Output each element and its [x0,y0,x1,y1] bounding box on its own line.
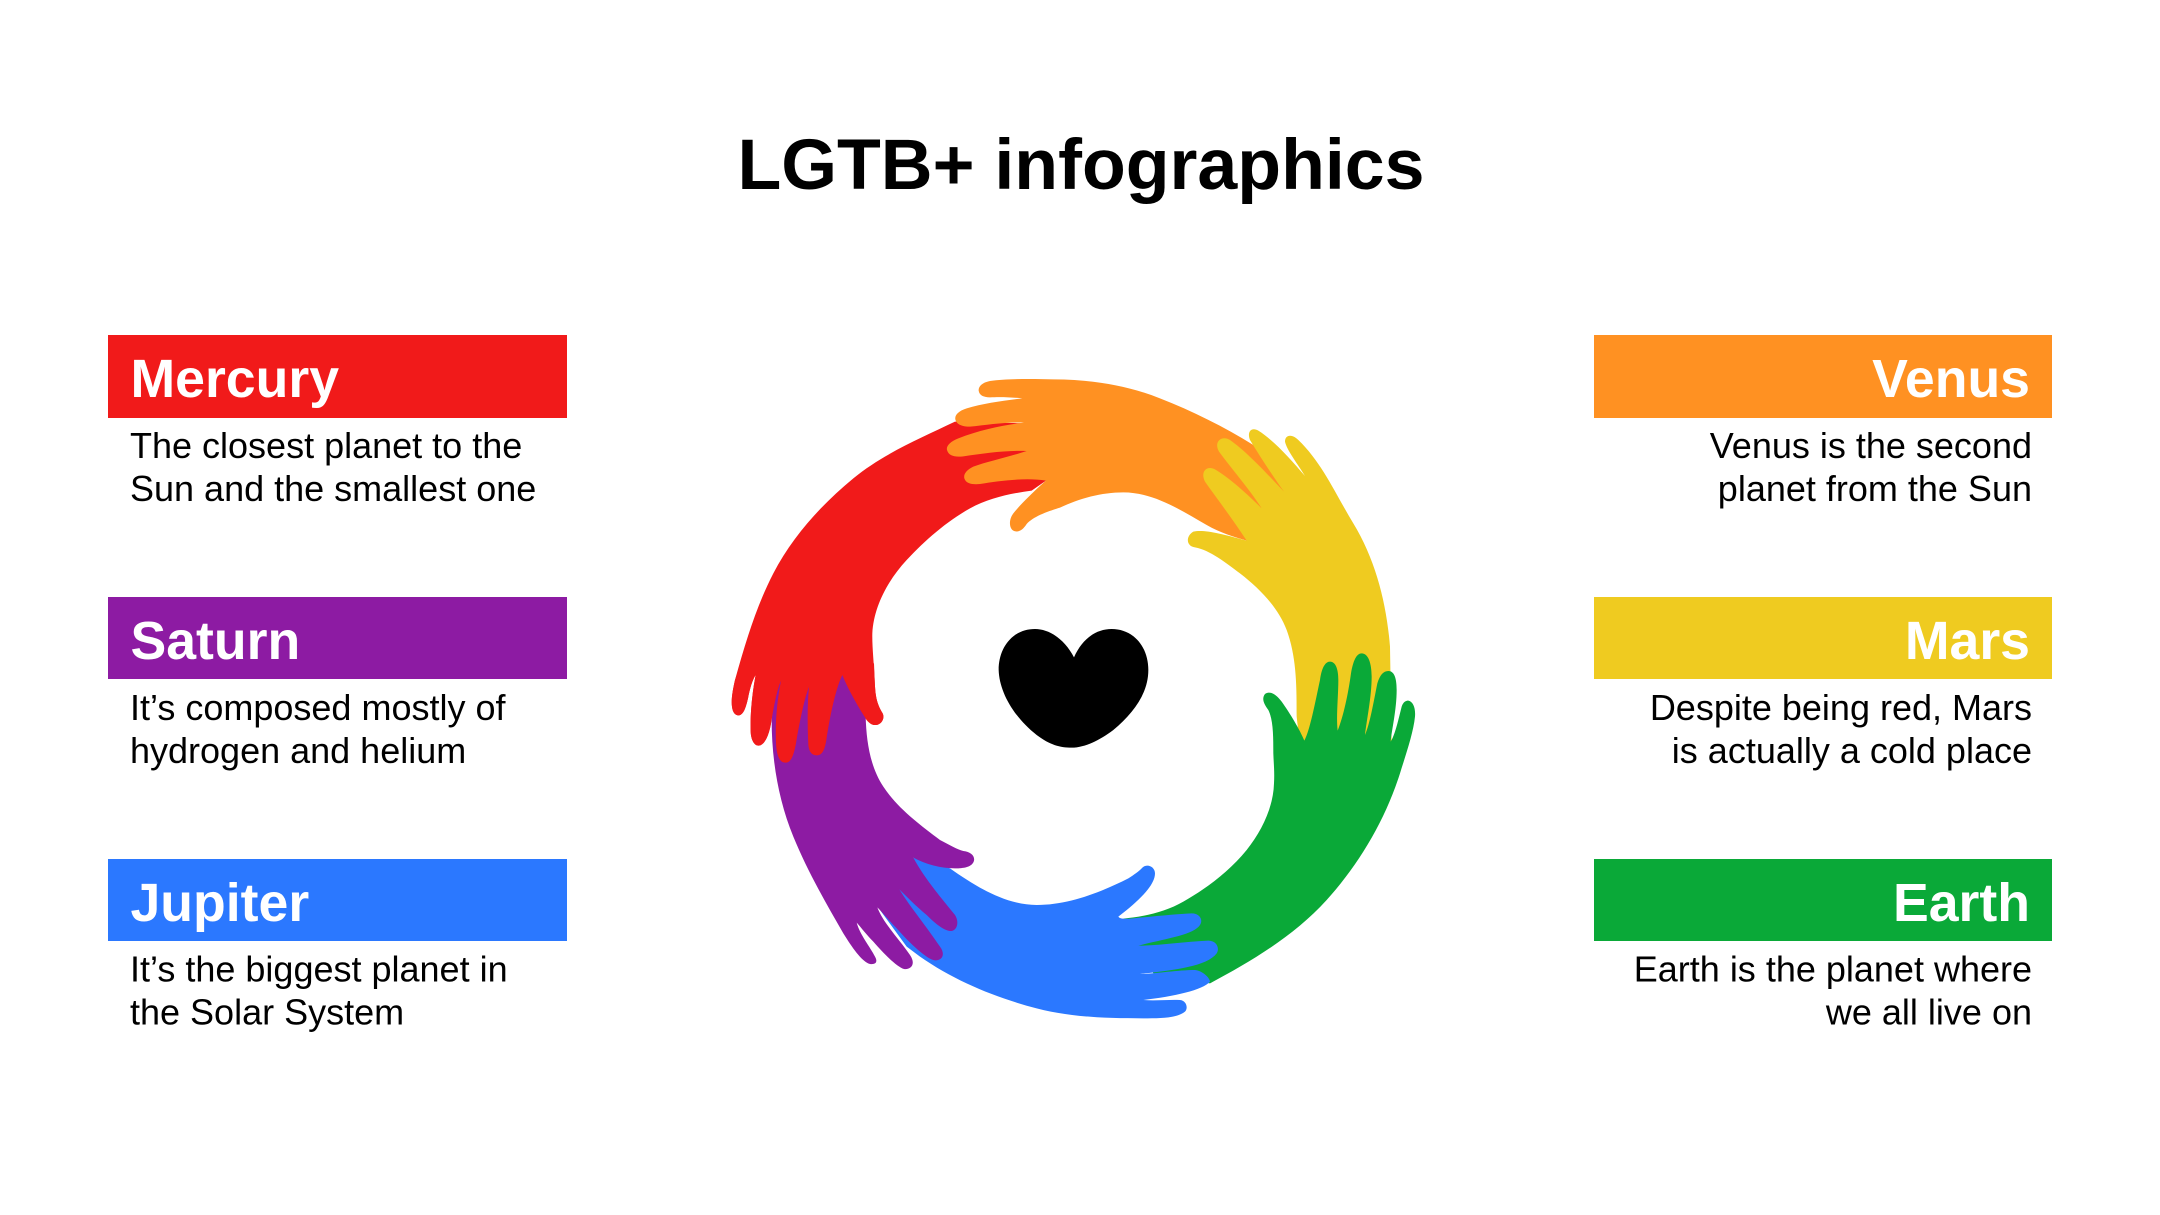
panel: Mars: is actually a cold place [1672,730,2032,771]
panel: Jupiter: Jupiter [130,873,309,933]
panel: Jupiter [108,859,567,1032]
panel: Mercury [108,335,567,509]
panel: Earth: Earth is the planet where [1634,948,2032,990]
icon: red hand [732,422,1046,763]
panel: Earth: Earth [1893,873,2030,933]
panel: Jupiter: the Solar System [130,992,404,1032]
panel: Mercury: Sun and the smallest one [130,468,536,509]
title: LGTB+ infographics [737,125,1425,205]
panel: Mercury: Mercury [130,349,339,409]
icon: green hand [1123,653,1415,983]
panel: Earth: we all live on [1825,992,2032,1032]
panel: Saturn: It’s composed mostly of [130,687,506,728]
icon: red fingers over purple [732,663,883,763]
panel: Earth [1594,859,2052,1032]
icon: blue hand [880,857,1218,1018]
panel: Venus: planet from the Sun [1718,468,2032,509]
panel: Mercury: The closest planet to the [130,425,522,466]
panel: Saturn: Saturn [130,611,300,671]
icon: purple hand [772,673,974,969]
panel: Mars: Mars [1905,611,2030,671]
panel: Saturn: hydrogen and helium [130,730,466,771]
panel: Venus: Venus is the second [1710,425,2032,466]
panel: Mars: Despite being red, Mars [1650,687,2032,728]
icon: yellow hand [1188,429,1392,747]
icon: orange hand [947,379,1287,541]
panel: Jupiter: It’s the biggest planet in [130,948,508,990]
panel: Mars [1594,597,2052,771]
panel: Venus: Venus [1872,349,2030,409]
panel: Venus [1594,335,2052,509]
panel: Saturn [108,597,567,771]
ring of rainbow hands [732,379,1415,1018]
icon: black heart [999,629,1148,748]
